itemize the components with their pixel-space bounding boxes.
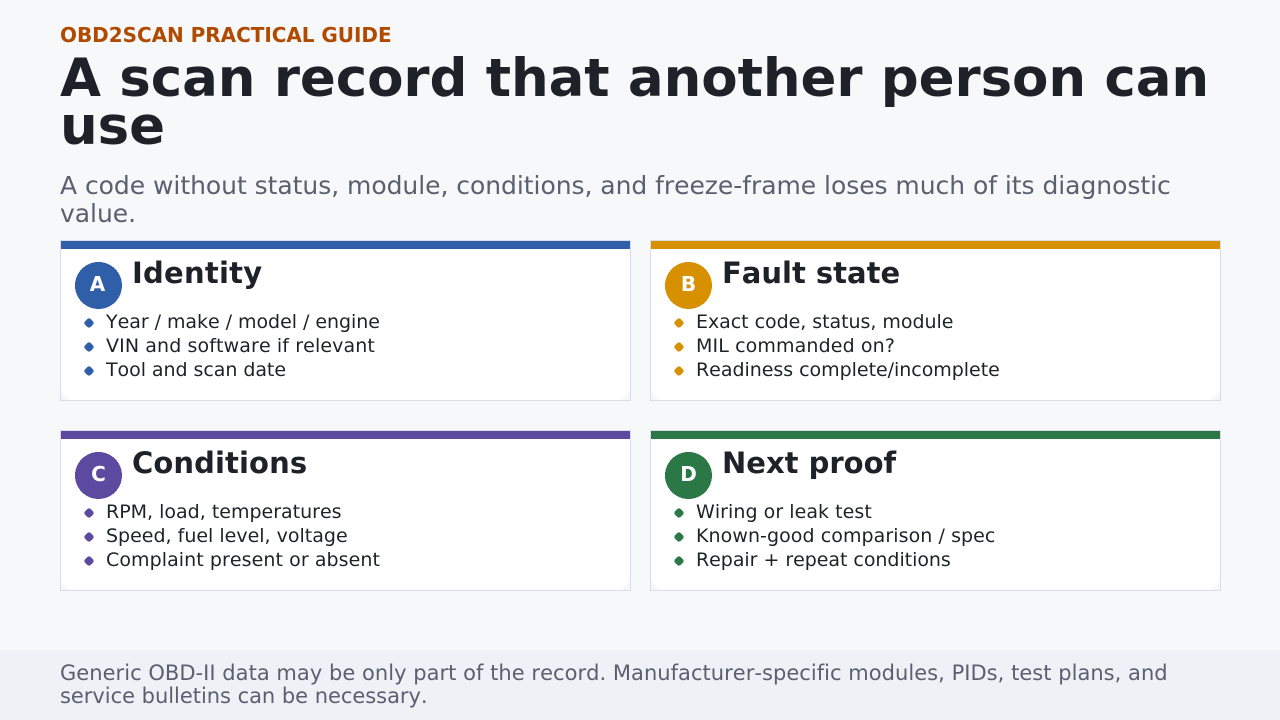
- bullet: wiring: Wiring or leak test: [696, 501, 872, 523]
- bullet: year make model: Year / make / model / engine: [106, 311, 380, 333]
- eyebrow: OBD2SCAN PRACTICAL GUIDE: [60, 23, 392, 47]
- badge D: [665, 452, 712, 499]
- bullet: known-good: Known-good comparison / spec: [696, 525, 995, 547]
- footer note: [60, 661, 1168, 708]
- badge B: [665, 262, 712, 309]
- panel accent bar: Next proof: [650, 430, 1221, 439]
- badge C: [75, 452, 122, 499]
- subtitle: A code without status, module, conditions, and freeze-frame loses much of its diagnostic: [60, 171, 1171, 200]
- subtitle: [60, 171, 1171, 228]
- heading: Conditions: Conditions: [132, 446, 307, 480]
- heading: Identity: Identity: [132, 256, 262, 290]
- panel: Conditions: [60, 430, 631, 591]
- panel accent bar: Fault state: [650, 240, 1221, 249]
- bullet: speed: Speed, fuel level, voltage: [106, 525, 348, 547]
- footer note: service bulletins can be necessary.: [60, 684, 428, 708]
- bullet: exact code: Exact code, status, module: [696, 311, 953, 333]
- panel accent bar: Conditions: [60, 430, 631, 439]
- subtitle: value.: [60, 199, 136, 228]
- heading: Next proof: Next proof: [722, 446, 896, 480]
- badge B: B: [681, 272, 696, 296]
- list: Next proof: [674, 501, 995, 571]
- badge D: D: [680, 462, 697, 486]
- bullet: repair: Repair + repeat conditions: [696, 549, 951, 571]
- badge A: [75, 262, 122, 309]
- footer band: [0, 650, 1280, 720]
- bullet: complaint: Complaint present or absent: [106, 549, 380, 571]
- list: Conditions: [84, 501, 380, 571]
- bullet: readiness: Readiness complete/incomplete: [696, 359, 1000, 381]
- bullet: tool and date: Tool and scan date: [106, 359, 286, 381]
- title: A scan record that another person can: [60, 48, 1209, 109]
- panel: Next proof: [650, 430, 1221, 591]
- title: [60, 48, 1209, 157]
- bullet: MIL: MIL commanded on?: [696, 335, 895, 357]
- list: Identity: [84, 311, 380, 381]
- panel: Identity: [60, 240, 631, 401]
- heading: Fault state: Fault state: [722, 256, 900, 290]
- panel accent bar: Identity: [60, 240, 631, 249]
- footer note: Generic OBD-II data may be only part of the record. Manufacturer-specific modules, PIDs, test plans, and: [60, 661, 1168, 685]
- badge A: A: [90, 272, 105, 296]
- title: use: [60, 96, 165, 157]
- bullet: VIN: VIN and software if relevant: [106, 335, 375, 357]
- bullet: RPM: RPM, load, temperatures: [106, 501, 342, 523]
- list: Fault state: [674, 311, 1000, 381]
- panel: Fault state: [650, 240, 1221, 401]
- badge C: C: [91, 462, 106, 486]
